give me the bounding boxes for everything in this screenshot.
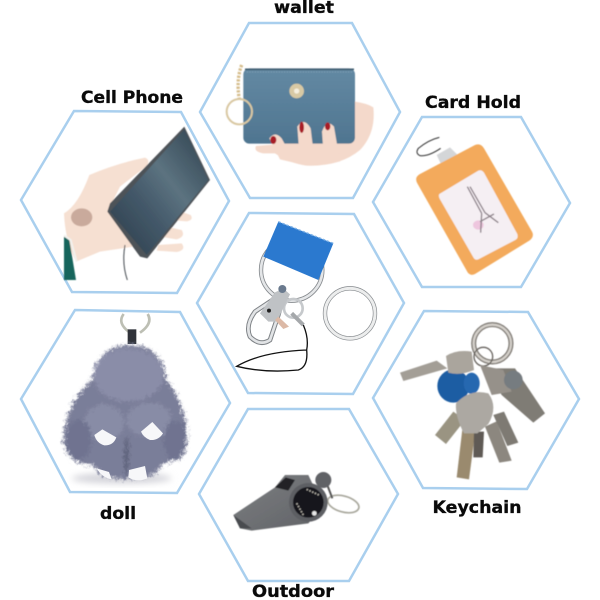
icon: grey fur bunny keychain <box>63 314 187 484</box>
hexagon outline: outdoor <box>199 409 398 581</box>
heading: cell phone: Cell Phone <box>81 88 183 108</box>
icon: blue leather strap with clasp, split ring and cord <box>237 222 375 371</box>
panel: cell phone <box>21 88 229 293</box>
hexagon outline: doll <box>21 310 230 493</box>
panel: outdoor <box>199 409 398 600</box>
panel: keychain <box>373 311 579 518</box>
heading: keychain: Keychain <box>432 498 522 518</box>
heading: card holder: Card Hold <box>425 93 521 113</box>
hexagon outline: center <box>197 213 404 394</box>
icon: hand holding phone <box>64 127 210 280</box>
hexagon outline: card holder <box>373 117 570 287</box>
hexagon outline: cell phone <box>21 111 229 293</box>
panel: wallet <box>200 0 400 198</box>
icon: wallet held in hand <box>227 65 374 166</box>
hexagon outline: keychain <box>373 311 579 489</box>
panel: doll <box>21 310 230 524</box>
icon: orange card holder with lanyard <box>416 137 533 275</box>
icon: grey whistle with compass <box>233 472 361 531</box>
heading: doll: doll <box>100 504 136 524</box>
hexagon outline: wallet <box>200 23 400 198</box>
panel: center keyring product <box>197 213 404 394</box>
panel: card holder <box>373 93 570 287</box>
icon: bunch of keys on a ring <box>400 325 545 479</box>
